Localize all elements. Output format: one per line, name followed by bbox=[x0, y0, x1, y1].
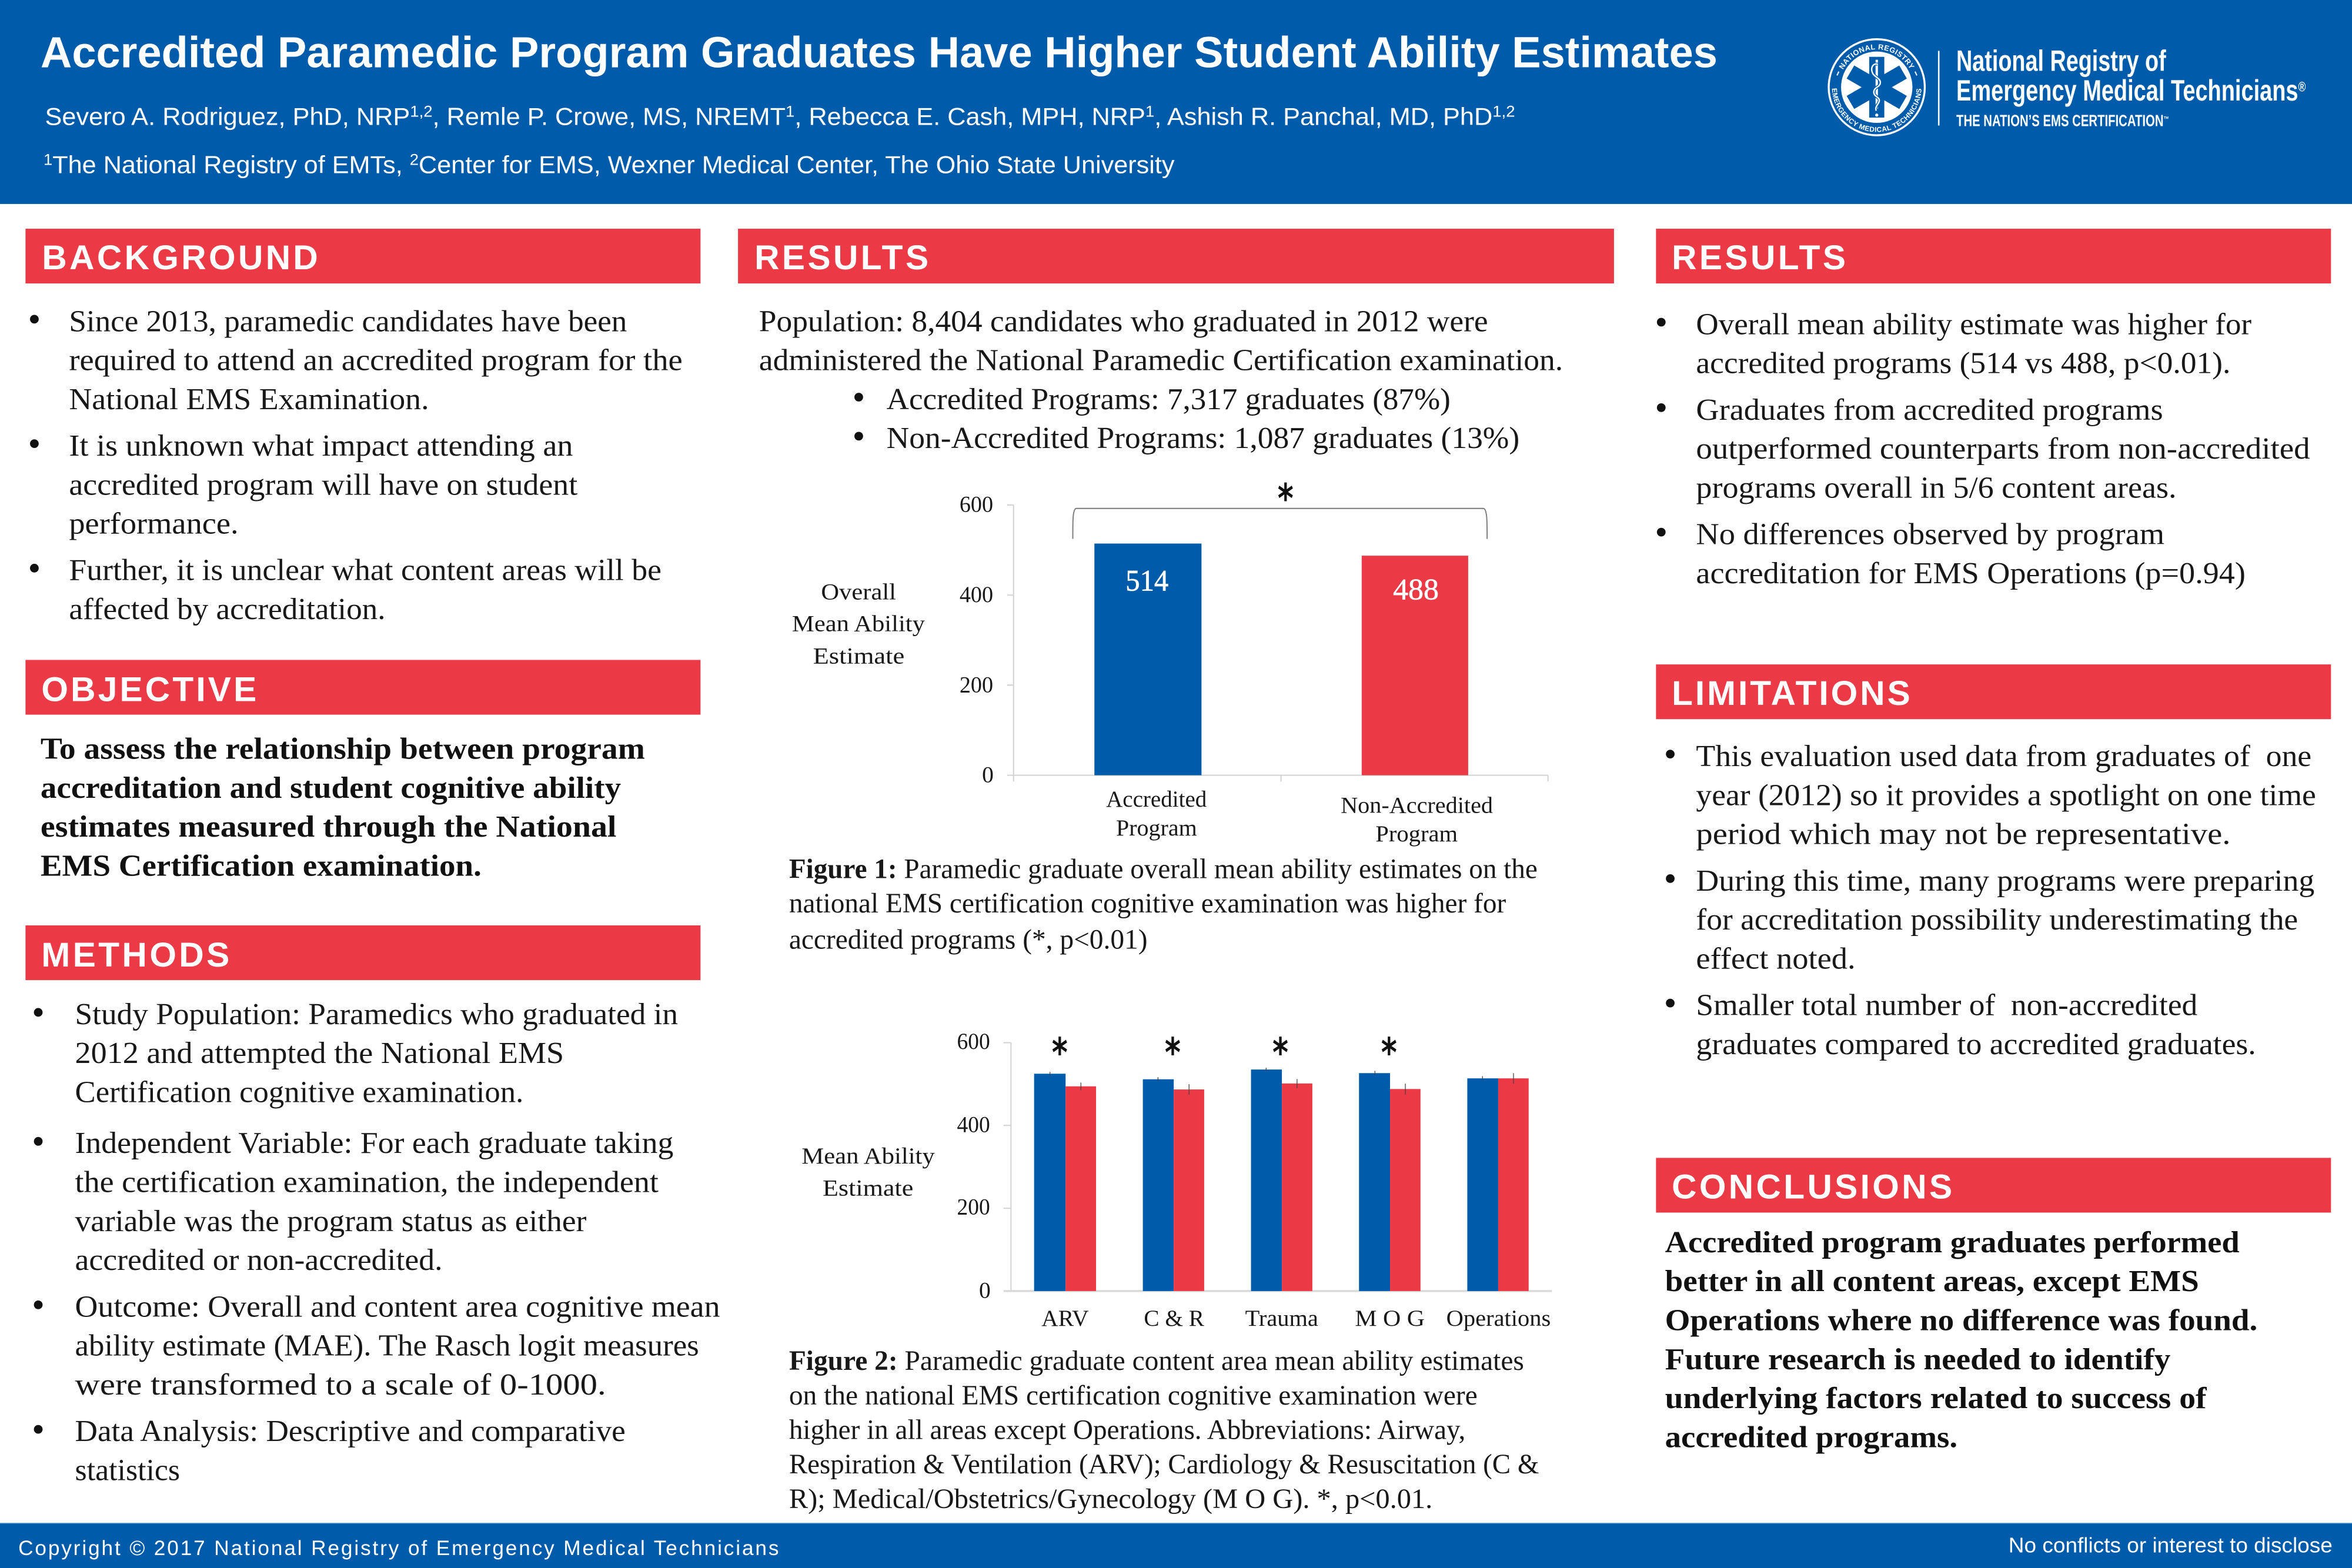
axes bbox=[1004, 1042, 1011, 1291]
y axis title: Estimate bbox=[823, 1175, 913, 1201]
y axis title: Estimate bbox=[813, 643, 904, 668]
panel: methods bbox=[25, 925, 720, 1487]
bullet list: methods: variable was the program status as either bbox=[75, 1205, 586, 1238]
bullet list: methods: 2012 and attempted the National EMS bbox=[75, 1037, 564, 1070]
y axis labels: 400 bbox=[960, 581, 993, 607]
y axis title: Overall bbox=[821, 579, 896, 605]
affiliations: The National Registry of EMTs, bbox=[52, 151, 410, 179]
x axis labels bbox=[1041, 1305, 1551, 1331]
icon: star of life seal: NATIONAL REGISTRY bbox=[1839, 44, 1915, 69]
bar: accredited 514 bbox=[1094, 543, 1201, 775]
bullet list: limitations: period which may not be representative. bbox=[1696, 818, 2230, 851]
population text: Non-Accredited Programs: 1,087 graduates (13%) bbox=[887, 422, 1519, 455]
bullet list: methods: statistics bbox=[75, 1453, 180, 1487]
icon: star of life seal: EMERGENCY MEDICAL TECHNICIANS bbox=[1832, 88, 1922, 132]
conclusion statement: underlying factors related to success of bbox=[1665, 1382, 2207, 1415]
heading: background: BACKGROUND bbox=[42, 239, 318, 277]
bullet list: results: programs overall in 5/6 content areas. bbox=[1696, 471, 2177, 504]
caption: figure 2: R); Medical/Obstetrics/Gynecology (M O G). *, p<0.01. bbox=[789, 1484, 1432, 1514]
bullet list: limitations: Smaller total number of non-accredited bbox=[1696, 989, 2197, 1022]
conclusion statement: accredited programs. bbox=[1665, 1420, 1957, 1454]
heading: results: RESULTS bbox=[754, 239, 928, 277]
y axis title bbox=[801, 1143, 935, 1201]
bullet list: results: accredited programs (514 vs 488, p<0.01). bbox=[1696, 347, 2230, 380]
objective statement bbox=[41, 733, 645, 883]
bullet list: background: affected by accreditation. bbox=[69, 593, 386, 626]
bars: ARV bbox=[1034, 1072, 1096, 1291]
bar chart: figure 1 bbox=[792, 476, 1548, 847]
bullet list: methods: accredited or non-accredited. bbox=[75, 1243, 443, 1277]
bullet list: background: It is unknown what impact attending an bbox=[69, 429, 573, 463]
y axis labels: 400 bbox=[957, 1111, 990, 1137]
footer bar bbox=[0, 1523, 2352, 1568]
bullet list: methods: Certification cognitive examination. bbox=[75, 1075, 523, 1109]
authors: Severo A. Rodriguez, PhD, NRP bbox=[45, 103, 400, 131]
title: Accredited Paramedic Program Graduates Have Higher Student Ability Estimates bbox=[41, 28, 1718, 76]
x axis labels: Program bbox=[1375, 821, 1458, 847]
bullet list: limitations: During this time, many programs were preparing bbox=[1696, 864, 2314, 898]
x axis labels: Accredited bbox=[1106, 786, 1207, 812]
logo: National Registry of EMTs: National Registry of bbox=[1956, 45, 2166, 78]
y axis title: Mean Ability bbox=[792, 610, 925, 636]
logo: National Registry of EMTs: ™ bbox=[2164, 115, 2169, 123]
conclusion statement: Operations where no difference was found. bbox=[1665, 1304, 2257, 1338]
y axis labels: 200 bbox=[957, 1194, 990, 1220]
authors: 1,2 bbox=[1492, 102, 1515, 120]
bullet list: background: performance. bbox=[69, 507, 239, 541]
caption: figure 2 bbox=[789, 1346, 1539, 1514]
caption: figure 2: Figure 2: Paramedic graduate content area mean ability estimates bbox=[789, 1346, 1524, 1376]
heading: limitations: LIMITATIONS bbox=[1672, 674, 1910, 713]
panel: results (right) bbox=[1656, 229, 2331, 590]
bar: non-accredited 488 bbox=[1362, 556, 1468, 775]
affiliations: 1 bbox=[44, 151, 52, 169]
bars: Operations bbox=[1467, 1073, 1529, 1291]
heading: results bbox=[1656, 229, 2331, 283]
bullet list: methods: Data Analysis: Descriptive and comparative bbox=[75, 1415, 626, 1448]
panel: results (centre) bbox=[738, 229, 1614, 1514]
y axis labels: 600 bbox=[960, 491, 993, 517]
y axis title bbox=[792, 579, 925, 668]
objective statement: estimates measured through the National bbox=[41, 810, 616, 844]
population text: administered the National Paramedic Certification examination. bbox=[759, 344, 1563, 377]
significance stars: * bbox=[1272, 1029, 1288, 1076]
y axis labels: 0 bbox=[979, 1277, 991, 1303]
objective statement: EMS Certification examination. bbox=[41, 850, 482, 883]
caption: figure 2: higher in all areas except Operations. Abbreviations: Airway, bbox=[789, 1415, 1465, 1445]
authors: 1,2 bbox=[410, 102, 433, 120]
x axis labels: Non-Accredited bbox=[1341, 792, 1493, 818]
bullet list: methods: were transformed to a scale of 0-1000. bbox=[75, 1368, 606, 1402]
conclusion statement: Future research is needed to identify bbox=[1665, 1343, 2170, 1376]
y axis labels bbox=[957, 1028, 991, 1303]
bar chart: figure 2 bbox=[801, 1028, 1552, 1331]
x axis labels: M O G bbox=[1355, 1305, 1425, 1331]
bullet list: methods bbox=[34, 998, 720, 1487]
caption: figure 1: accredited programs (*, p<0.01) bbox=[789, 924, 1148, 955]
population text: Accredited Programs: 7,317 graduates (87%) bbox=[887, 383, 1451, 416]
heading: objective bbox=[25, 660, 700, 715]
bullet list: methods: Outcome: Overall and content area cognitive mean bbox=[75, 1290, 720, 1323]
bullet list: background: Since 2013, paramedic candidates have been bbox=[69, 305, 627, 338]
caption: figure 1: Figure 1: Paramedic graduate overall mean ability estimates on the bbox=[789, 854, 1538, 884]
caption: figure 2: on the national EMS certification cognitive examination were bbox=[789, 1380, 1478, 1411]
bullet list: limitations: year (2012) so it provides a spotlight on one time bbox=[1696, 778, 2316, 812]
bullet list: methods: ability estimate (MAE). The Rasch logit measures bbox=[75, 1329, 699, 1363]
caption: figure 1: national EMS certification cognitive examination was higher for bbox=[789, 888, 1506, 919]
bars: M O G bbox=[1359, 1071, 1421, 1291]
bullet list: limitations bbox=[1666, 740, 2316, 1061]
bullet list: results: Overall mean ability estimate was higher for bbox=[1696, 307, 2251, 341]
x axis labels: Trauma bbox=[1245, 1305, 1318, 1331]
authors: , Rebecca E. Cash, MPH, NRP bbox=[794, 103, 1145, 131]
significance stars bbox=[1052, 1029, 1397, 1076]
axes bbox=[1007, 505, 1548, 781]
panel: limitations bbox=[1656, 664, 2331, 1061]
disclosure: No conflicts or interest to disclose bbox=[2009, 1533, 2333, 1557]
x axis labels: ARV bbox=[1041, 1305, 1089, 1331]
authors: 1 bbox=[786, 102, 794, 120]
conclusion statement: better in all content areas, except EMS bbox=[1665, 1265, 2199, 1298]
bullet list: background: required to attend an accredited program for the bbox=[69, 344, 683, 377]
heading: background bbox=[25, 229, 700, 283]
heading: results bbox=[738, 229, 1614, 283]
bullet list: results: accreditation for EMS Operations (p=0.94) bbox=[1696, 557, 2246, 590]
significance stars: * bbox=[1165, 1029, 1181, 1076]
header banner bbox=[0, 0, 2352, 204]
bullet list: limitations: effect noted. bbox=[1696, 942, 1856, 975]
bullet list: background: Further, it is unclear what content areas will be bbox=[69, 554, 662, 587]
bars: C & R bbox=[1143, 1077, 1204, 1291]
logo: National Registry of EMTs: ® bbox=[2298, 79, 2306, 95]
authors: , Remle P. Crowe, MS, NREMT bbox=[433, 103, 786, 131]
x axis labels: C & R bbox=[1144, 1305, 1205, 1331]
bullet list: results: outperformed counterparts from non-accredited bbox=[1696, 432, 2310, 466]
bullet list: limitations: This evaluation used data from graduates of one bbox=[1696, 740, 2311, 773]
authors: , Ashish R. Panchal, MD, PhD bbox=[1154, 103, 1492, 131]
heading: results: RESULTS bbox=[1672, 239, 1846, 277]
bullet list: background: National EMS Examination. bbox=[69, 383, 429, 416]
bullet list: background bbox=[30, 305, 683, 626]
bars: Trauma bbox=[1251, 1068, 1312, 1291]
conclusion statement: Accredited program graduates performed bbox=[1665, 1226, 2240, 1259]
bullet list: limitations: graduates compared to accredited graduates. bbox=[1696, 1028, 2256, 1061]
significance bracket: * bbox=[1278, 476, 1294, 523]
logo: National Registry of EMTs bbox=[1828, 38, 2352, 136]
copyright: Copyright © 2017 National Registry of Emergency Medical Technicians bbox=[18, 1537, 779, 1560]
significance stars: * bbox=[1052, 1029, 1068, 1076]
y axis labels: 200 bbox=[960, 671, 993, 697]
affiliations: Center for EMS, Wexner Medical Center, The Ohio State University bbox=[419, 151, 1174, 179]
bar: accredited 514: 514 bbox=[1125, 564, 1168, 597]
heading: methods bbox=[25, 925, 700, 980]
objective statement: To assess the relationship between program bbox=[41, 733, 645, 766]
bullet list: results: No differences observed by program bbox=[1696, 518, 2164, 551]
heading: conclusions: CONCLUSIONS bbox=[1672, 1168, 1952, 1206]
objective statement: accreditation and student cognitive ability bbox=[41, 771, 621, 805]
x axis labels: Program bbox=[1116, 815, 1197, 841]
significance bracket bbox=[1073, 476, 1487, 539]
heading: methods: METHODS bbox=[41, 936, 229, 974]
x axis labels: Operations bbox=[1446, 1305, 1551, 1331]
authors: 1 bbox=[1145, 102, 1154, 120]
heading: conclusions bbox=[1656, 1158, 2331, 1213]
caption: figure 2: Respiration & Ventilation (ARV); Cardiology & Resuscitation (C & bbox=[789, 1449, 1539, 1480]
panel: objective bbox=[25, 660, 700, 883]
bullet list: results: Graduates from accredited programs bbox=[1696, 393, 2163, 427]
bullet list: background: accredited program will have on student bbox=[69, 468, 578, 502]
population text bbox=[759, 305, 1563, 455]
logo: National Registry of EMTs: THE NATION’S EMS CERTIFICATION bbox=[1956, 112, 2243, 130]
heading: objective: OBJECTIVE bbox=[41, 671, 256, 709]
y axis labels bbox=[960, 491, 994, 788]
icon: star of life seal bbox=[1828, 38, 1926, 136]
significance stars: * bbox=[1381, 1029, 1397, 1076]
bullet list: methods: the certification examination, the independent bbox=[75, 1166, 659, 1199]
y axis labels: 0 bbox=[982, 762, 994, 788]
y axis title: Mean Ability bbox=[801, 1143, 935, 1169]
conclusion statement bbox=[1665, 1226, 2257, 1454]
bullet list: results bbox=[1657, 307, 2310, 590]
y axis labels: 600 bbox=[957, 1028, 990, 1054]
panel: background bbox=[25, 229, 700, 626]
bar: non-accredited 488: 488 bbox=[1393, 574, 1439, 607]
bullet list: limitations: for accreditation possibility underestimating the bbox=[1696, 903, 2298, 937]
panel: conclusions bbox=[1656, 1158, 2331, 1454]
bullet list: methods: Independent Variable: For each graduate taking bbox=[75, 1126, 673, 1160]
caption: figure 1 bbox=[789, 854, 1538, 955]
population text: Population: 8,404 candidates who graduated in 2012 were bbox=[759, 305, 1488, 338]
affiliations: 2 bbox=[410, 151, 419, 169]
heading: limitations bbox=[1656, 664, 2331, 719]
x axis labels bbox=[1106, 786, 1493, 847]
bullet list: methods: Study Population: Paramedics who graduated in bbox=[75, 998, 678, 1031]
